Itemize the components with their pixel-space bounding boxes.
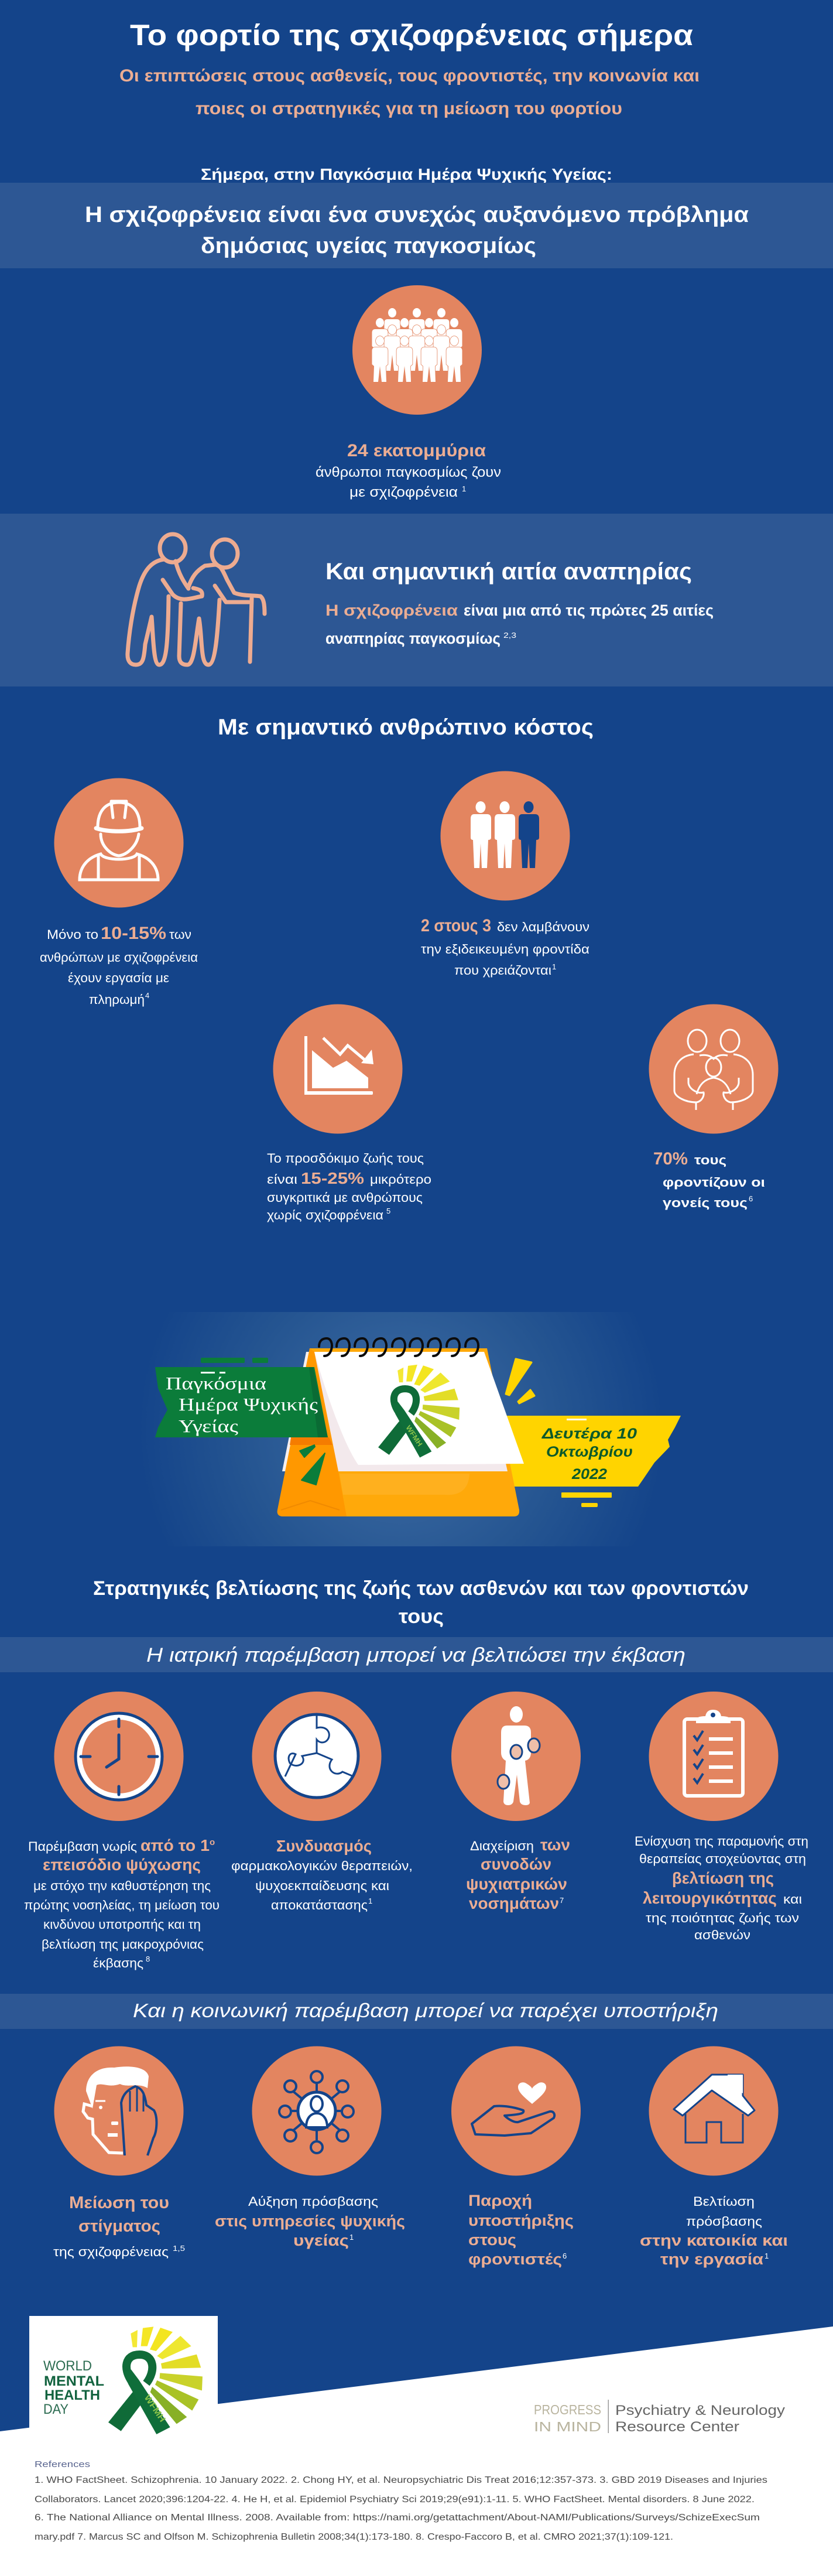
icon: clipboard checklist: [649, 1692, 779, 1821]
text: early intervention: βελτίωση της μακροχρόνιας: [42, 1937, 204, 1952]
logo: world mental health day: DAY: [43, 2401, 68, 2417]
text: access to mental health services: 1: [349, 2233, 354, 2242]
text: reduce stigma: της σχιζοφρένειας: [53, 2244, 169, 2259]
text: employment: πληρωμή: [89, 992, 145, 1007]
text: life expectancy: 5: [386, 1207, 390, 1215]
text: housing and employment: πρόσβασης: [686, 2214, 762, 2229]
icon: ribbon and sunburst on calendar: WFMH: [404, 1424, 424, 1448]
text: life expectancy: Το προσδόκιμο ζωής τους: [267, 1151, 424, 1166]
references: Collaborators. Lancet 2020;396:1204-22. 4. He H, et al. Epidemiol Psychiatry Sci 2019;29(e91):1-11. 5. WHO FactSheet. Mental disorders. 8 June 2022.: [35, 2495, 755, 2505]
text: caregiver support: Παροχή: [468, 2192, 532, 2209]
intro line: Σήμερα, στην Παγκόσμια Ημέρα Ψυχικής Υγείας:: [201, 165, 612, 183]
text: housing and employment: την εργασία: [660, 2250, 763, 2268]
calendar pages: [314, 1352, 524, 1471]
text: treatment adherence: λειτουργικότητας: [643, 1889, 777, 1907]
text: employment: [40, 924, 198, 1007]
text: early intervention: κινδύνου υποτροπής και τη: [43, 1917, 201, 1932]
references: References: [35, 2459, 90, 2469]
logo: progress in mind: Resource Center: [615, 2419, 739, 2435]
text: disability detail: αναπηρίας παγκοσμίως: [325, 630, 501, 647]
text: 24 million: άνθρωποι παγκοσμίως ζουν: [316, 464, 501, 480]
text: disability detail: [325, 602, 714, 647]
text: caregiver support: [468, 2192, 574, 2268]
text: two of three: 1: [552, 962, 556, 971]
text: housing and employment: [640, 2194, 788, 2268]
text: caregiver support: φροντιστές: [468, 2250, 562, 2268]
green banner: [155, 1358, 332, 1445]
text: treatment adherence: [635, 1834, 808, 1942]
text: early intervention: 8: [146, 1955, 150, 1963]
text: treatment adherence: θεραπείας στοχεύοντας στη: [639, 1851, 806, 1866]
text: reduce stigma: στίγματος: [78, 2217, 160, 2236]
text: access to mental health services: υγείας: [293, 2232, 349, 2249]
text: reduce stigma: 1,5: [173, 2244, 185, 2253]
panel: social intervention band: [0, 1994, 833, 2029]
icon: body with comorbidity markers: [451, 1692, 581, 1821]
green banner: Ημέρα Ψυχικής: [179, 1394, 318, 1415]
text: early intervention: πρώτης νοσηλείας, τη μείωση του: [24, 1898, 220, 1912]
text: parents care for 70%: γονείς τους: [663, 1195, 748, 1210]
text: early intervention: Παρέμβαση νωρίς: [28, 1839, 137, 1854]
text: access to mental health services: στις υπηρεσίες ψυχικής: [215, 2212, 405, 2230]
text: parents care for 70%: 6: [749, 1194, 753, 1203]
text: caregiver support: στους: [468, 2231, 516, 2249]
yellow date banner: Οκτωβρίου: [546, 1444, 633, 1460]
icon: elderly couple: [128, 534, 265, 665]
text: psychiatric comorbidities: [466, 1836, 570, 1912]
text: early intervention: [24, 1836, 220, 1970]
text: housing and employment: 1: [765, 2252, 769, 2260]
logo: world mental health day: [29, 2316, 218, 2439]
text: combination: ψυχοεκπαίδευσης και: [255, 1878, 389, 1893]
text: psychiatric comorbidities: Διαχείριση: [470, 1839, 534, 1853]
subtitle: ποιες οι στρατηγικές για τη μείωση του φορτίου: [196, 99, 622, 118]
green banner: Παγκόσμια: [166, 1373, 266, 1393]
text: combination: αποκατάστασης: [271, 1898, 368, 1912]
green banner: Υγείας: [179, 1416, 238, 1436]
text: disability detail: 2,3: [503, 631, 516, 640]
text: parents care for 70%: [653, 1149, 765, 1210]
logo: world mental health day: MENTAL: [44, 2373, 104, 2389]
text: access to mental health services: [215, 2194, 405, 2249]
text: employment: ανθρώπων με σχιζοφρένεια: [40, 950, 198, 965]
text: life expectancy: [267, 1151, 431, 1222]
icon: declining chart: [273, 1004, 403, 1134]
text: combination: [231, 1837, 413, 1912]
text: employment: Μόνο το: [47, 927, 98, 942]
text: early intervention: έκβασης: [93, 1956, 143, 1970]
calendar base: [277, 1348, 519, 1516]
text: disability detail: Η σχιζοφρένεια: [325, 602, 458, 619]
text: employment: 10-15%: [101, 924, 166, 943]
text: caregiver support: 6: [563, 2252, 567, 2260]
green burst marks: [300, 1445, 325, 1485]
icon: caregiver parents with child: [649, 1004, 779, 1134]
text: combination: 1: [368, 1897, 372, 1905]
logo: world mental health day: HEALTH: [44, 2387, 100, 2403]
logo: progress in mind: Psychiatry & Neurology: [615, 2403, 785, 2418]
text: early intervention: επεισόδιο ψύχωσης: [43, 1856, 201, 1874]
text: treatment adherence: Ενίσχυση της παραμονής στη: [635, 1834, 808, 1849]
panel: growing public health problem band: [0, 183, 833, 268]
icon: ribbon and sunburst on calendar: [378, 1365, 460, 1458]
text: life expectancy: χωρίς σχιζοφρένεια: [267, 1208, 383, 1222]
text: housing and employment: στην κατοικία και: [640, 2232, 788, 2249]
logo: progress in mind: PROGRESS: [534, 2402, 601, 2417]
text: parents care for 70%: φροντίζουν οι: [663, 1175, 765, 1190]
icon: crowd of people: [352, 285, 482, 415]
yellow date banner: 2022: [571, 1466, 607, 1482]
text: early intervention: με στόχο την καθυστέρηση της: [33, 1878, 211, 1893]
text: treatment adherence: της ποιότητας ζωής των: [646, 1911, 799, 1925]
references: 6. The National Alliance on Mental Illness. 2008. Available from: https://nami.org/getattachment/About-NAMI/Publications/Surveys/SchizeExecSum: [35, 2513, 760, 2523]
panel: growing public health problem band: Η σχιζοφρένεια είναι ένα συνεχώς αυξανόμενο πρόβλημα: [85, 203, 749, 227]
panel: cause of disability band: [0, 514, 833, 686]
icon: three people, two of three: [440, 771, 570, 901]
panel: world mental health day calendar: [0, 1312, 833, 1546]
text: 24 million: [316, 441, 501, 500]
heading: cause of disability: Και σημαντική αιτία αναπηρίας: [325, 559, 692, 585]
calendar rings: [319, 1338, 478, 1356]
text: access to mental health services: Αύξηση πρόσβασης: [248, 2194, 378, 2209]
text: life expectancy: είναι: [267, 1172, 297, 1187]
text: housing and employment: Βελτίωση: [693, 2194, 755, 2209]
panel: growing public health problem band: δημόσιας υγείας παγκοσμίως: [201, 234, 536, 258]
subtitle: [119, 66, 700, 118]
icon: puzzle pieces: [252, 1692, 382, 1821]
heading: human cost: Με σημαντικό ανθρώπινο κόστος: [218, 715, 594, 740]
heading: strategies: τους: [399, 1605, 444, 1628]
yellow date banner: [502, 1416, 681, 1507]
text: reduce stigma: [53, 2194, 185, 2259]
text: employment: έχουν εργασία με: [68, 971, 169, 985]
logo: world mental health day: WORLD: [43, 2358, 92, 2374]
text: psychiatric comorbidities: 7: [560, 1896, 564, 1905]
text: parents care for 70%: τους: [694, 1153, 726, 1167]
text: employment: των: [169, 927, 191, 942]
text: disability detail: είναι μια από τις πρώτες 25 αιτίες: [464, 602, 714, 619]
text: life expectancy: 15-25%: [301, 1169, 364, 1187]
heading: strategies: [93, 1577, 749, 1628]
text: employment: 4: [145, 991, 149, 1000]
text: psychiatric comorbidities: των: [540, 1836, 570, 1854]
icon: face covered by hand: [54, 2047, 184, 2175]
text: two of three: [421, 916, 589, 978]
subtitle: Οι επιπτώσεις στους ασθενείς, τους φροντιστές, την κοινωνία και: [119, 66, 700, 86]
text: life expectancy: συγκριτικά με ανθρώπους: [267, 1190, 423, 1205]
text: two of three: δεν λαμβάνουν: [497, 920, 589, 934]
yellow burst marks: [506, 1359, 534, 1403]
icon: house: [649, 2047, 779, 2175]
text: two of three: την εξιδεικευμένη φροντίδα: [421, 942, 589, 956]
text: two of three: που χρειάζονται: [454, 963, 551, 978]
text: two of three: 2 στους 3: [421, 916, 491, 935]
title: Το φορτίο της σχιζοφρένειας σήμερα: [130, 19, 693, 52]
text: treatment adherence: βελτίωση της: [672, 1869, 774, 1887]
text: combination: φαρμακολογικών θεραπειών,: [231, 1858, 413, 1873]
text: early intervention: ο: [210, 1837, 215, 1847]
text: treatment adherence: και: [783, 1892, 802, 1907]
text: 24 million: με σχιζοφρένεια: [349, 484, 458, 500]
icon: clock: [54, 1692, 184, 1821]
header: [119, 19, 700, 183]
text: life expectancy: μικρότερο: [370, 1172, 431, 1187]
text: treatment adherence: ασθενών: [694, 1928, 750, 1942]
text: early intervention: από το 1: [140, 1836, 210, 1854]
references: mary.pdf 7. Marcus SC and Olfson M. Schizophrenia Bulletin 2008;34(1):173-180. 8. Crespo-Faccoro B, et al. CMRO 2021;37(1):109-121.: [35, 2532, 673, 2542]
text: caregiver support: υποστήριξης: [468, 2212, 574, 2229]
references: [35, 2459, 767, 2542]
text: psychiatric comorbidities: συνοδών: [481, 1855, 551, 1873]
icon: hand holding heart: [451, 2047, 581, 2175]
icon: network around person: [252, 2047, 382, 2175]
text: psychiatric comorbidities: ψυχιατρικών: [466, 1875, 567, 1893]
references: 1. WHO FactSheet. Schizophrenia. 10 January 2022. 2. Chong HY, et al. Neuropsychiatric Dis Treat 2016;12:357-373. 3. GBD 2019 Diseases and Injuries: [35, 2475, 767, 2485]
heading: strategies: Στρατηγικές βελτίωσης της ζωής των ασθενών και των φροντιστών: [93, 1577, 749, 1600]
icon: construction worker: [54, 778, 184, 908]
logo: progress in mind: [534, 2400, 785, 2435]
panel: medical intervention band: Η ιατρική παρέμβαση μπορεί να βελτιώσει την έκβαση: [146, 1644, 685, 1666]
text: 24 million: 1: [462, 484, 466, 493]
text: 24 million: 24 εκατομμύρια: [347, 441, 486, 460]
yellow date banner: Δευτέρα 10: [541, 1426, 637, 1442]
logo: world mental health day: WFMH: [142, 2393, 167, 2424]
logo: progress in mind: IN MIND: [534, 2419, 601, 2434]
text: combination: Συνδυασμός: [276, 1837, 372, 1855]
panel: social intervention band: Και η κοινωνική παρέμβαση μπορεί να παρέχει υποστήριξη: [133, 2000, 718, 2021]
text: parents care for 70%: 70%: [653, 1149, 688, 1169]
text: psychiatric comorbidities: νοσημάτων: [469, 1894, 559, 1912]
text: reduce stigma: Μείωση του: [69, 2194, 169, 2212]
panel: medical intervention band: [0, 1637, 833, 1672]
